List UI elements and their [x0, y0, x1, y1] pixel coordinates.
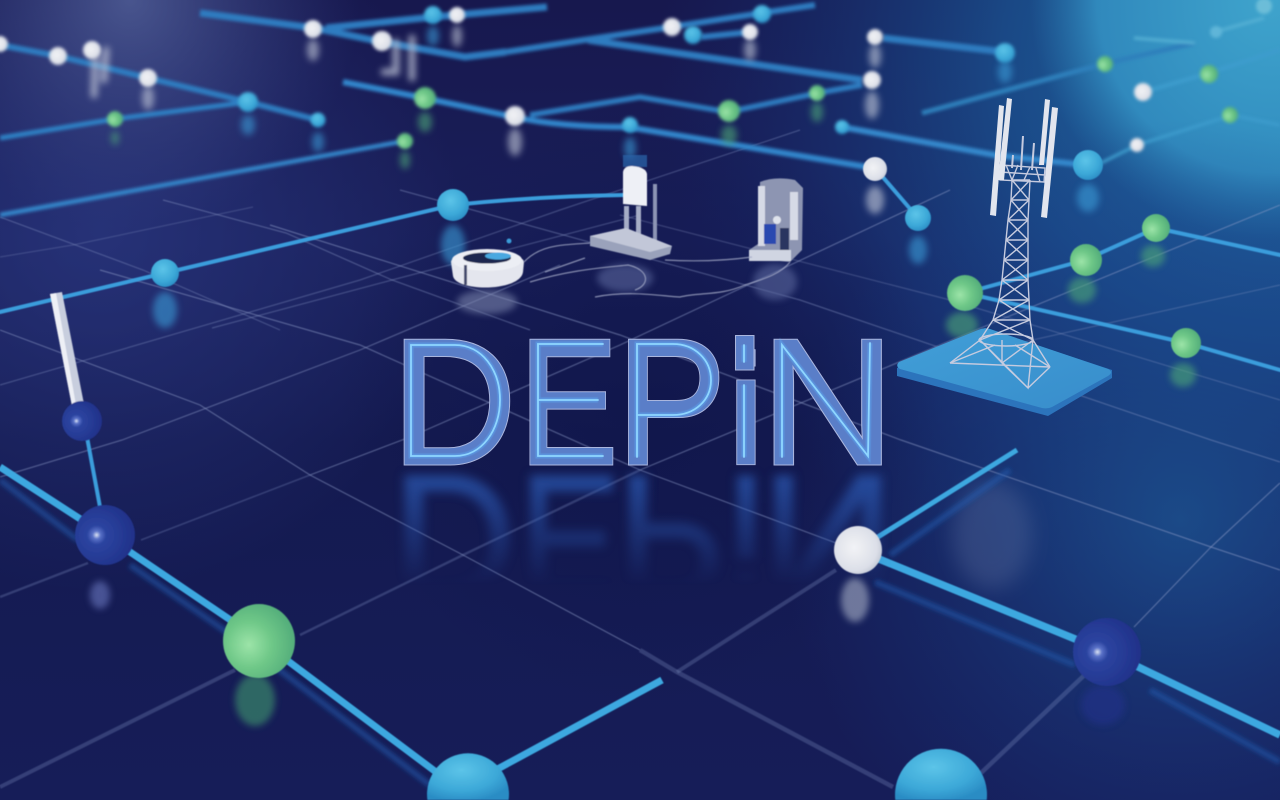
device: white antenna pole left — [50, 292, 102, 441]
tower lattice — [950, 165, 1050, 388]
tower top masts — [1012, 136, 1034, 170]
blurred far devices — [94, 38, 412, 95]
foreground nodes — [75, 505, 1141, 800]
title: DEPiN — [392, 303, 894, 502]
mid nodes — [151, 150, 1201, 358]
node: cyan bottom left — [427, 753, 509, 800]
node: navy right — [1073, 618, 1141, 686]
title letter edges: P — [617, 304, 726, 502]
node: white centre right — [834, 526, 882, 574]
title letter faces — [392, 303, 894, 502]
title letter edges: E — [520, 304, 617, 501]
foreground grid lines — [0, 470, 1093, 787]
device: router with white card — [590, 155, 672, 260]
node: cyan bottom right — [895, 749, 987, 800]
cell tower — [950, 98, 1058, 388]
tower floor reflection — [952, 481, 1032, 589]
device: robot vacuum — [451, 238, 524, 288]
title letter edges: D — [392, 303, 516, 501]
neon tubes in letters — [411, 343, 870, 457]
node reflections — [90, 25, 1196, 726]
DEPiN letter reflections: P — [617, 438, 726, 636]
far background network lines — [0, 5, 1280, 215]
node: navy left — [75, 505, 135, 565]
DEPiN letter reflections: E — [520, 439, 617, 636]
floor grid lines — [0, 130, 1280, 650]
DEPiN letter reflections: D — [392, 439, 516, 637]
DEPiN letter reflections: N — [761, 439, 894, 637]
antenna panels — [990, 98, 1058, 218]
foreground line reflections — [0, 470, 1280, 785]
DEPiN letter reflections — [399, 470, 886, 572]
node: green foreground — [223, 604, 295, 678]
far background nodes — [0, 0, 1272, 152]
device cables — [524, 243, 790, 297]
DEPiN letter reflections: i — [728, 444, 764, 616]
title letter faces: N — [761, 303, 894, 501]
title letter faces: D — [392, 303, 516, 501]
neon tube glow — [411, 343, 870, 457]
title letter faces: P — [617, 304, 726, 502]
foreground network lines — [0, 450, 1280, 785]
title letter edges — [392, 303, 894, 502]
mid network lines — [0, 168, 1280, 507]
title letter edges: N — [761, 303, 894, 501]
title letter faces: i — [728, 324, 764, 496]
tower platform — [897, 328, 1112, 416]
title letter faces: E — [520, 304, 617, 501]
device: hub enclosure — [749, 178, 803, 262]
title letter edges: i — [728, 324, 764, 496]
